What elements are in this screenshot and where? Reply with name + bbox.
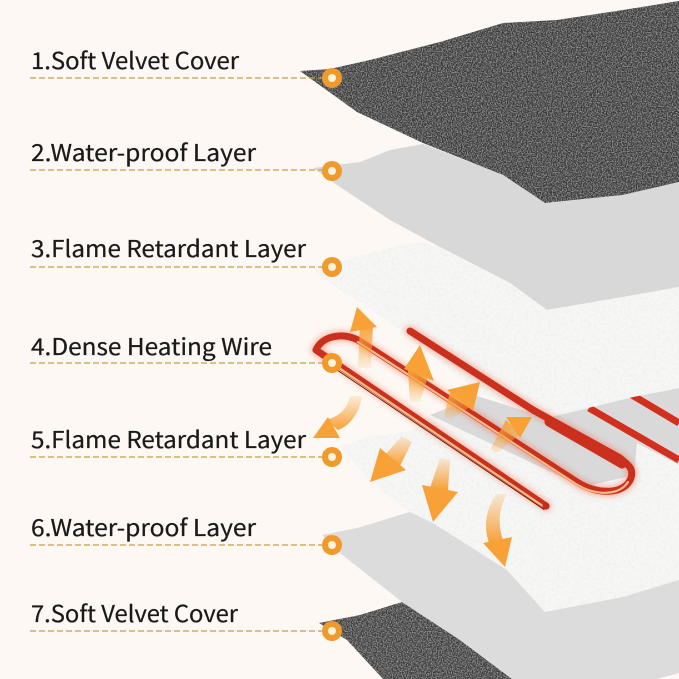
arrow down xyxy=(422,458,458,522)
label 7 xyxy=(30,595,342,641)
label 7: 7.Soft Velvet Cover xyxy=(31,595,238,629)
label 4 xyxy=(30,328,342,373)
arrow curved down xyxy=(483,494,512,567)
arrow right xyxy=(491,417,532,454)
heating wire xyxy=(316,331,632,510)
marker 6 xyxy=(322,535,342,555)
layer 7: dark velvet cover bottom xyxy=(319,602,512,679)
arrow up middle xyxy=(404,345,434,402)
marker 5 xyxy=(322,447,342,467)
wire segments beneath layer xyxy=(589,395,679,460)
label 5: 5.Flame Retardant Layer xyxy=(31,421,306,455)
wire highlight xyxy=(331,342,628,508)
arrow up-left xyxy=(350,307,377,368)
arrow down-left xyxy=(370,436,412,482)
layer 6: grey water-proof layer bottom xyxy=(322,512,679,679)
label 6 xyxy=(30,509,342,555)
heat arrows xyxy=(313,307,532,567)
label 4: 4.Dense Heating Wire xyxy=(31,328,272,362)
layer 3: white flame retardant layer xyxy=(313,242,679,418)
label 2 xyxy=(30,134,342,181)
label 3 xyxy=(30,230,342,277)
label 2: 2.Water-proof Layer xyxy=(31,134,256,168)
label 3: 3.Flame Retardant Layer xyxy=(31,230,306,264)
arrow curved left xyxy=(313,396,362,438)
layer 5: white flame retardant layer xyxy=(340,400,679,612)
label 1 xyxy=(30,42,342,88)
marker 2 xyxy=(322,161,342,181)
marker 4 xyxy=(322,353,342,373)
marker 3 xyxy=(322,257,342,277)
label 1: 1.Soft Velvet Cover xyxy=(31,42,239,76)
shadow gap under layer 3 xyxy=(430,388,679,487)
wire thick return section xyxy=(549,422,622,464)
wire body xyxy=(316,331,632,506)
marker 1 xyxy=(322,68,342,88)
label 5 xyxy=(30,421,342,467)
layer 1: dark velvet cover xyxy=(300,1,679,203)
label 6: 6.Water-proof Layer xyxy=(31,509,256,543)
wire dark edge xyxy=(329,364,544,510)
wire tip xyxy=(542,502,550,510)
arrow up-right xyxy=(444,382,480,420)
marker 7 xyxy=(322,621,342,641)
wire glow xyxy=(316,331,632,506)
layer 2: grey water-proof layer xyxy=(313,144,679,310)
